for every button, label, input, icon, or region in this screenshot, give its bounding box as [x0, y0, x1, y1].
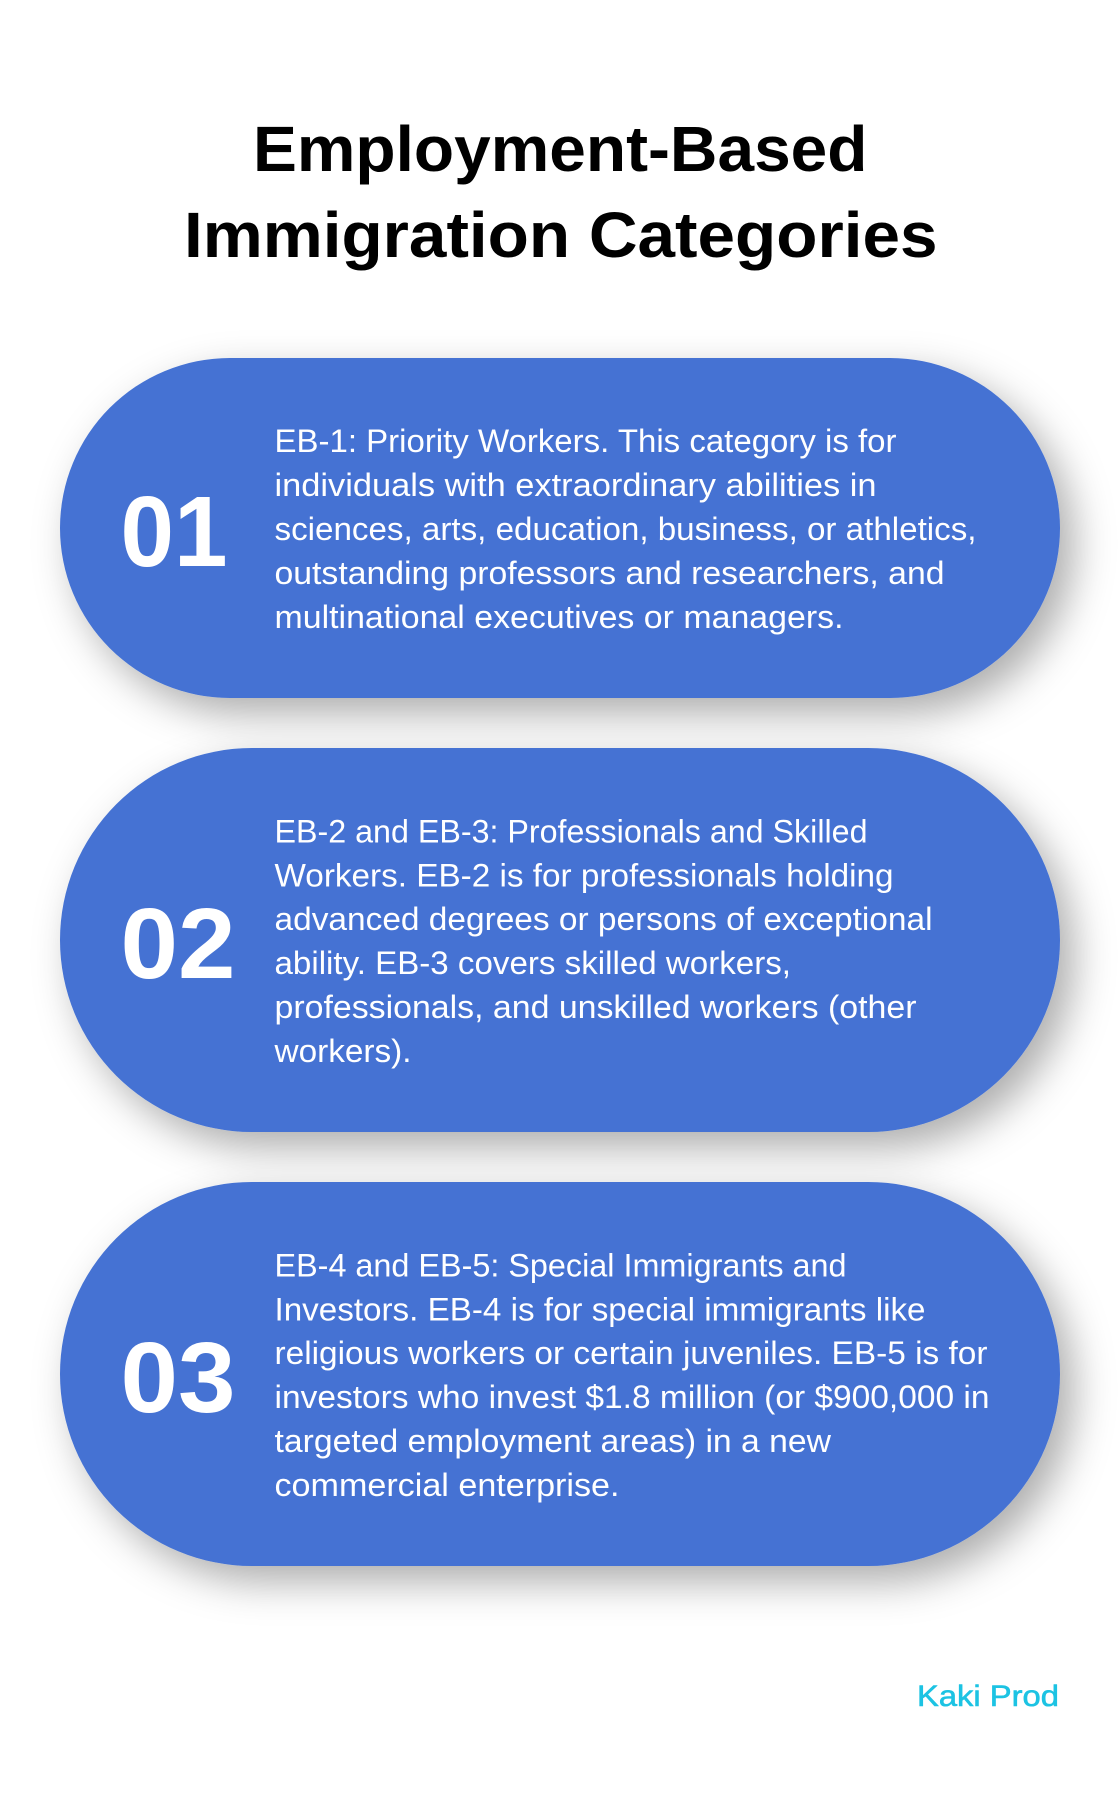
text: EB-1 description: EB-1: Priority Workers. This category is for	[274, 423, 897, 459]
text: EB-2 and EB-3 description: workers).	[273, 1033, 412, 1069]
text: EB-2 and EB-3 description	[273, 814, 932, 1069]
title: Immigration Categories	[184, 199, 938, 271]
text: EB-2 and EB-3 description: Workers. EB-2 is for professionals holding	[274, 858, 894, 894]
text: EB-4 and EB-5 description	[274, 1248, 990, 1503]
title: Employment-Based	[253, 113, 868, 185]
text: EB-4 and EB-5 description: EB-4 and EB-5: Special Immigrants and	[274, 1248, 846, 1284]
number 01: 01	[120, 476, 228, 588]
text: EB-4 and EB-5 description: commercial enterprise.	[274, 1467, 620, 1503]
text: EB-2 and EB-3 description: professionals, and unskilled workers (other	[274, 989, 917, 1025]
text: EB-4 and EB-5 description: investors who invest $1.8 million (or $900,000 in	[274, 1379, 990, 1415]
text: EB-4 and EB-5 description: Investors. EB-4 is for special immigrants like	[274, 1292, 926, 1328]
text: EB-2 and EB-3 description: advanced degrees or persons of exceptional	[274, 901, 932, 937]
title	[184, 113, 938, 271]
text: EB-1 description: individuals with extraordinary abilities in	[274, 467, 876, 503]
logo: Kaki Prod: Kaki Prod	[917, 1680, 1059, 1713]
text: EB-2 and EB-3 description: ability. EB-3 covers skilled workers,	[274, 945, 791, 981]
number 02: 02	[120, 888, 236, 1000]
text: EB-4 and EB-5 description: religious workers or certain juveniles. EB-5 is for	[274, 1335, 988, 1371]
panel: EB-1	[60, 358, 1060, 698]
number 03: 03	[120, 1322, 236, 1434]
text: EB-4 and EB-5 description: targeted employment areas) in a new	[274, 1423, 832, 1459]
text: EB-2 and EB-3 description: EB-2 and EB-3: Professionals and Skilled	[274, 814, 867, 850]
text: EB-1 description: multinational executives or managers.	[274, 599, 844, 635]
panel: EB-4 and EB-5	[60, 1182, 1060, 1566]
text: EB-1 description: sciences, arts, education, business, or athletics,	[274, 511, 976, 547]
panel: EB-2 and EB-3	[60, 748, 1060, 1132]
text: EB-1 description	[274, 423, 976, 635]
text: EB-1 description: outstanding professors and researchers, and	[274, 555, 944, 591]
